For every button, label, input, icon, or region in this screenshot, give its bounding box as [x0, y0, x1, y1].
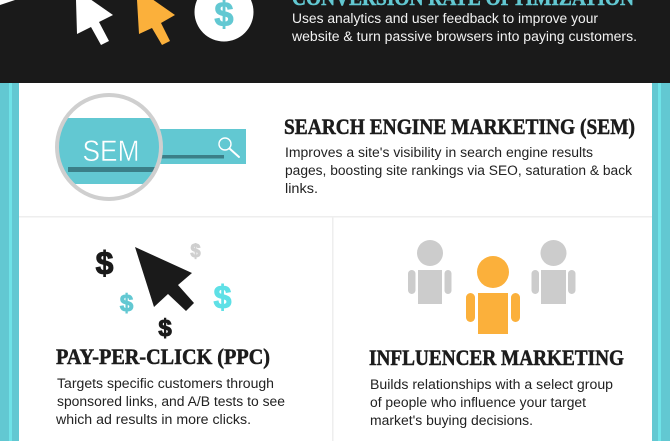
text: conversion description: website & turn passive browsers into paying customers. [291, 29, 637, 44]
icon: black cursor [135, 247, 194, 311]
icon: orange person [466, 256, 520, 334]
text: conversion description: Uses analytics and user feedback to improve your [292, 11, 599, 26]
right border stripe [652, 83, 670, 441]
icon: light cyan dollar: $ [214, 279, 232, 315]
icon: dollar coin [194, 0, 254, 42]
icon: black dollar: $ [96, 245, 114, 281]
panel: influencer marketing [369, 240, 624, 428]
heading: influencer marketing: INFLUENCER MARKETING [369, 345, 624, 370]
text: influencer description: market's buying decisions. [370, 413, 533, 428]
icon: SEM magnifier over search bar: SEM [82, 135, 140, 168]
icon: white corner fragment [0, 0, 15, 5]
icon: gray person right [532, 240, 576, 304]
icon: small black dollar: $ [158, 315, 172, 342]
text: SEM description: Improves a site's visibility in search engine results [285, 145, 593, 160]
heading: pay-per-click: PAY-PER-CLICK (PPC) [56, 344, 270, 369]
icon: gray dollar: $ [190, 241, 201, 261]
text: influencer description: Builds relationships with a select group [370, 377, 613, 392]
text: PPC description: which ad results in more clicks. [55, 412, 251, 427]
left border stripe [0, 83, 19, 441]
text: SEM description: pages, boosting site rankings via SEO, saturation & back [285, 163, 632, 178]
icon: gray person left [408, 240, 452, 304]
text: influencer description: of people who influence your target [370, 395, 586, 410]
icon: white cursor [76, 0, 113, 45]
panel: pay-per-click [55, 241, 285, 427]
text: SEM description: links. [285, 181, 318, 196]
text: influencer description [370, 377, 613, 428]
text: PPC description: sponsored links, and A/B tests to see [57, 394, 285, 409]
panel: search engine marketing [50, 95, 635, 199]
panel: conversion rate optimization [0, 0, 670, 83]
icon: orange cursor [137, 0, 175, 45]
text: conversion description [291, 11, 637, 44]
text: SEM description [285, 145, 632, 196]
icon: cyan dollar: $ [120, 290, 134, 317]
icon: SEM magnifier over search bar [50, 95, 246, 199]
text: PPC description: Targets specific customers through [57, 376, 274, 391]
text: PPC description [55, 376, 285, 427]
